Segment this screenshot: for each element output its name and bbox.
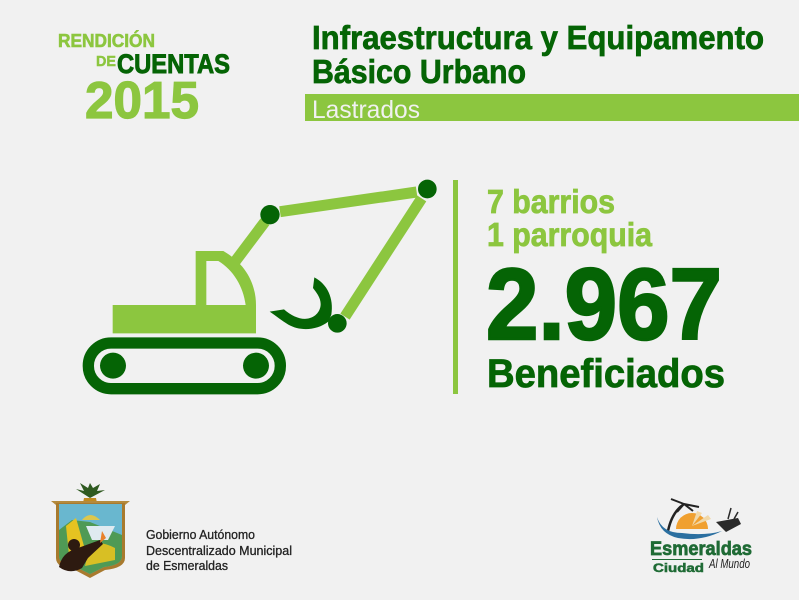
text: government name: de Esmeraldas: [146, 558, 228, 573]
logo: Rendición de Cuentas 2015: DE: [96, 53, 116, 70]
stat: beneficiaries number: 2.967: [486, 249, 722, 361]
icon: excavator: [88, 180, 437, 389]
title: Básico Urbano: [312, 53, 526, 90]
text: locations: 7 barrios: [487, 183, 615, 220]
title: [312, 19, 764, 90]
divider: [453, 180, 458, 394]
logo: Esmeraldas Ciudad al Mundo: Esmeraldas: [650, 539, 752, 560]
text: locations: [487, 183, 653, 253]
logo: Rendición de Cuentas 2015: RENDICIÓN: [58, 30, 155, 51]
title: Infraestructura y Equipamento: [312, 19, 764, 56]
logo: Rendición de Cuentas 2015: CUENTAS: [117, 49, 230, 79]
text: government name: [146, 527, 292, 573]
text: government name: Gobierno Autónomo: [146, 527, 255, 542]
logo: Rendición de Cuentas 2015: 2015: [85, 72, 199, 130]
subtitle bar: [305, 94, 799, 124]
excavator arm: [235, 180, 437, 317]
logo: Esmeraldas Ciudad al Mundo: Ciudad: [653, 561, 704, 575]
stat: beneficiaries label: Beneficiados: [487, 352, 725, 396]
excavator body and cab: [113, 251, 256, 333]
logo: Esmeraldas Ciudad al Mundo: Al Mundo: [708, 556, 750, 571]
excavator tracks: [88, 343, 280, 389]
logo: Esmeraldas Ciudad al Mundo: [650, 499, 752, 575]
logo: municipal coat of arms: [51, 483, 130, 578]
logo: Rendición de Cuentas 2015: [58, 30, 230, 130]
text: locations: 1 parroquia: [487, 216, 653, 253]
text: government name: Descentralizado Municipal: [146, 543, 292, 558]
excavator bucket: [270, 277, 347, 333]
subtitle bar: Lastrados: [312, 96, 420, 124]
